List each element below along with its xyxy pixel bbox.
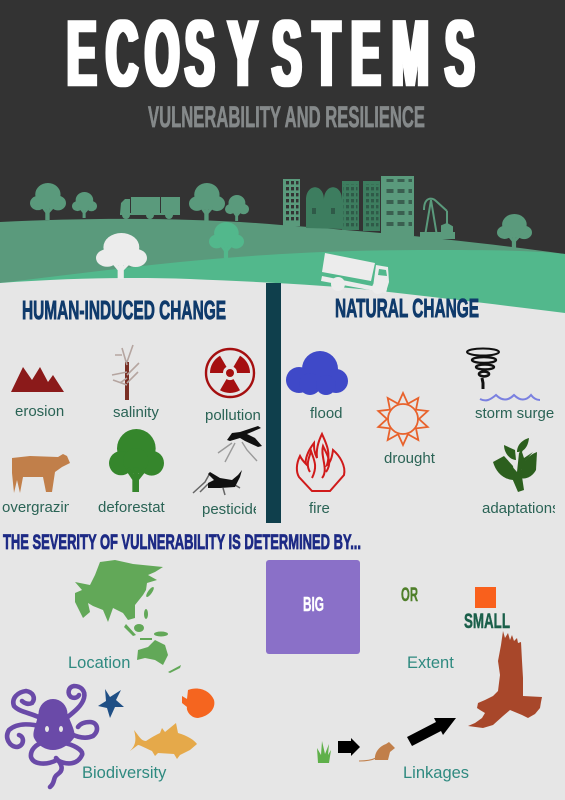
icon: plant (493, 438, 537, 492)
icon: cricket (193, 470, 242, 495)
icon: tornado (467, 348, 499, 389)
icon: mouse (359, 742, 395, 761)
title: ECOSYSTEMS (67, 1, 474, 106)
back hill (0, 219, 565, 320)
landscape illustration (0, 176, 565, 400)
central divider bar (266, 283, 281, 523)
oil pump (421, 199, 454, 238)
icon: tuna (130, 723, 197, 759)
icon: fire (297, 434, 344, 491)
tree on hill (209, 222, 244, 258)
small square (475, 587, 496, 608)
icon: sun (378, 393, 428, 445)
icon: Asia-Pacific map (75, 560, 181, 673)
city buildings (283, 176, 414, 236)
label: overgrazing: overgrazing (2, 499, 80, 516)
label: erosion: erosion (15, 403, 64, 420)
big square (266, 560, 360, 654)
white tree (96, 233, 147, 279)
heading: human-induced change: HUMAN-INDUCED CHANGE (22, 295, 226, 325)
label: drought: drought (384, 450, 436, 467)
label: BIG: BIG (303, 594, 324, 616)
label: SMALL: SMALL (464, 610, 510, 633)
icon: erosion mountains (11, 367, 64, 392)
icon: deforestation tree (109, 429, 164, 492)
front hill (0, 250, 565, 320)
icon: orange fish (182, 688, 214, 718)
label: biodiversity: Biodiversity (82, 764, 167, 782)
label: location: Location (68, 654, 130, 672)
icon: radiation symbol (206, 349, 254, 397)
small truck (120, 197, 180, 219)
label: OR: OR (401, 585, 418, 606)
label: extent: Extent (407, 654, 454, 672)
icon: octopus (7, 686, 97, 787)
label: deforestation: deforestation (98, 499, 185, 516)
white truck (321, 253, 389, 294)
tree row on back hill (30, 183, 532, 248)
icon: cow (12, 454, 70, 493)
label: pesticides: pesticides (202, 501, 269, 518)
label: salinity: salinity (113, 404, 159, 421)
dark header panel (0, 0, 565, 300)
label: storm surge: storm surge (475, 405, 554, 422)
icon: waves (480, 395, 540, 400)
foreground ground (0, 278, 565, 400)
arrow: grass to mouse (338, 738, 360, 756)
icon: eagle (468, 631, 542, 728)
label: flood: flood (310, 405, 343, 422)
label: pollution: pollution (205, 407, 261, 424)
arrow: mouse to eagle (407, 718, 456, 746)
label: adaptations: adaptations (482, 500, 560, 517)
icon: grass (317, 741, 331, 763)
label: linkages: Linkages (403, 764, 469, 782)
icon: mosquito (218, 426, 262, 462)
label: fire: fire (309, 500, 330, 517)
icon: starfish (98, 689, 124, 718)
icon: cloud (286, 351, 348, 395)
icon: bare tree for salinity (112, 345, 139, 400)
